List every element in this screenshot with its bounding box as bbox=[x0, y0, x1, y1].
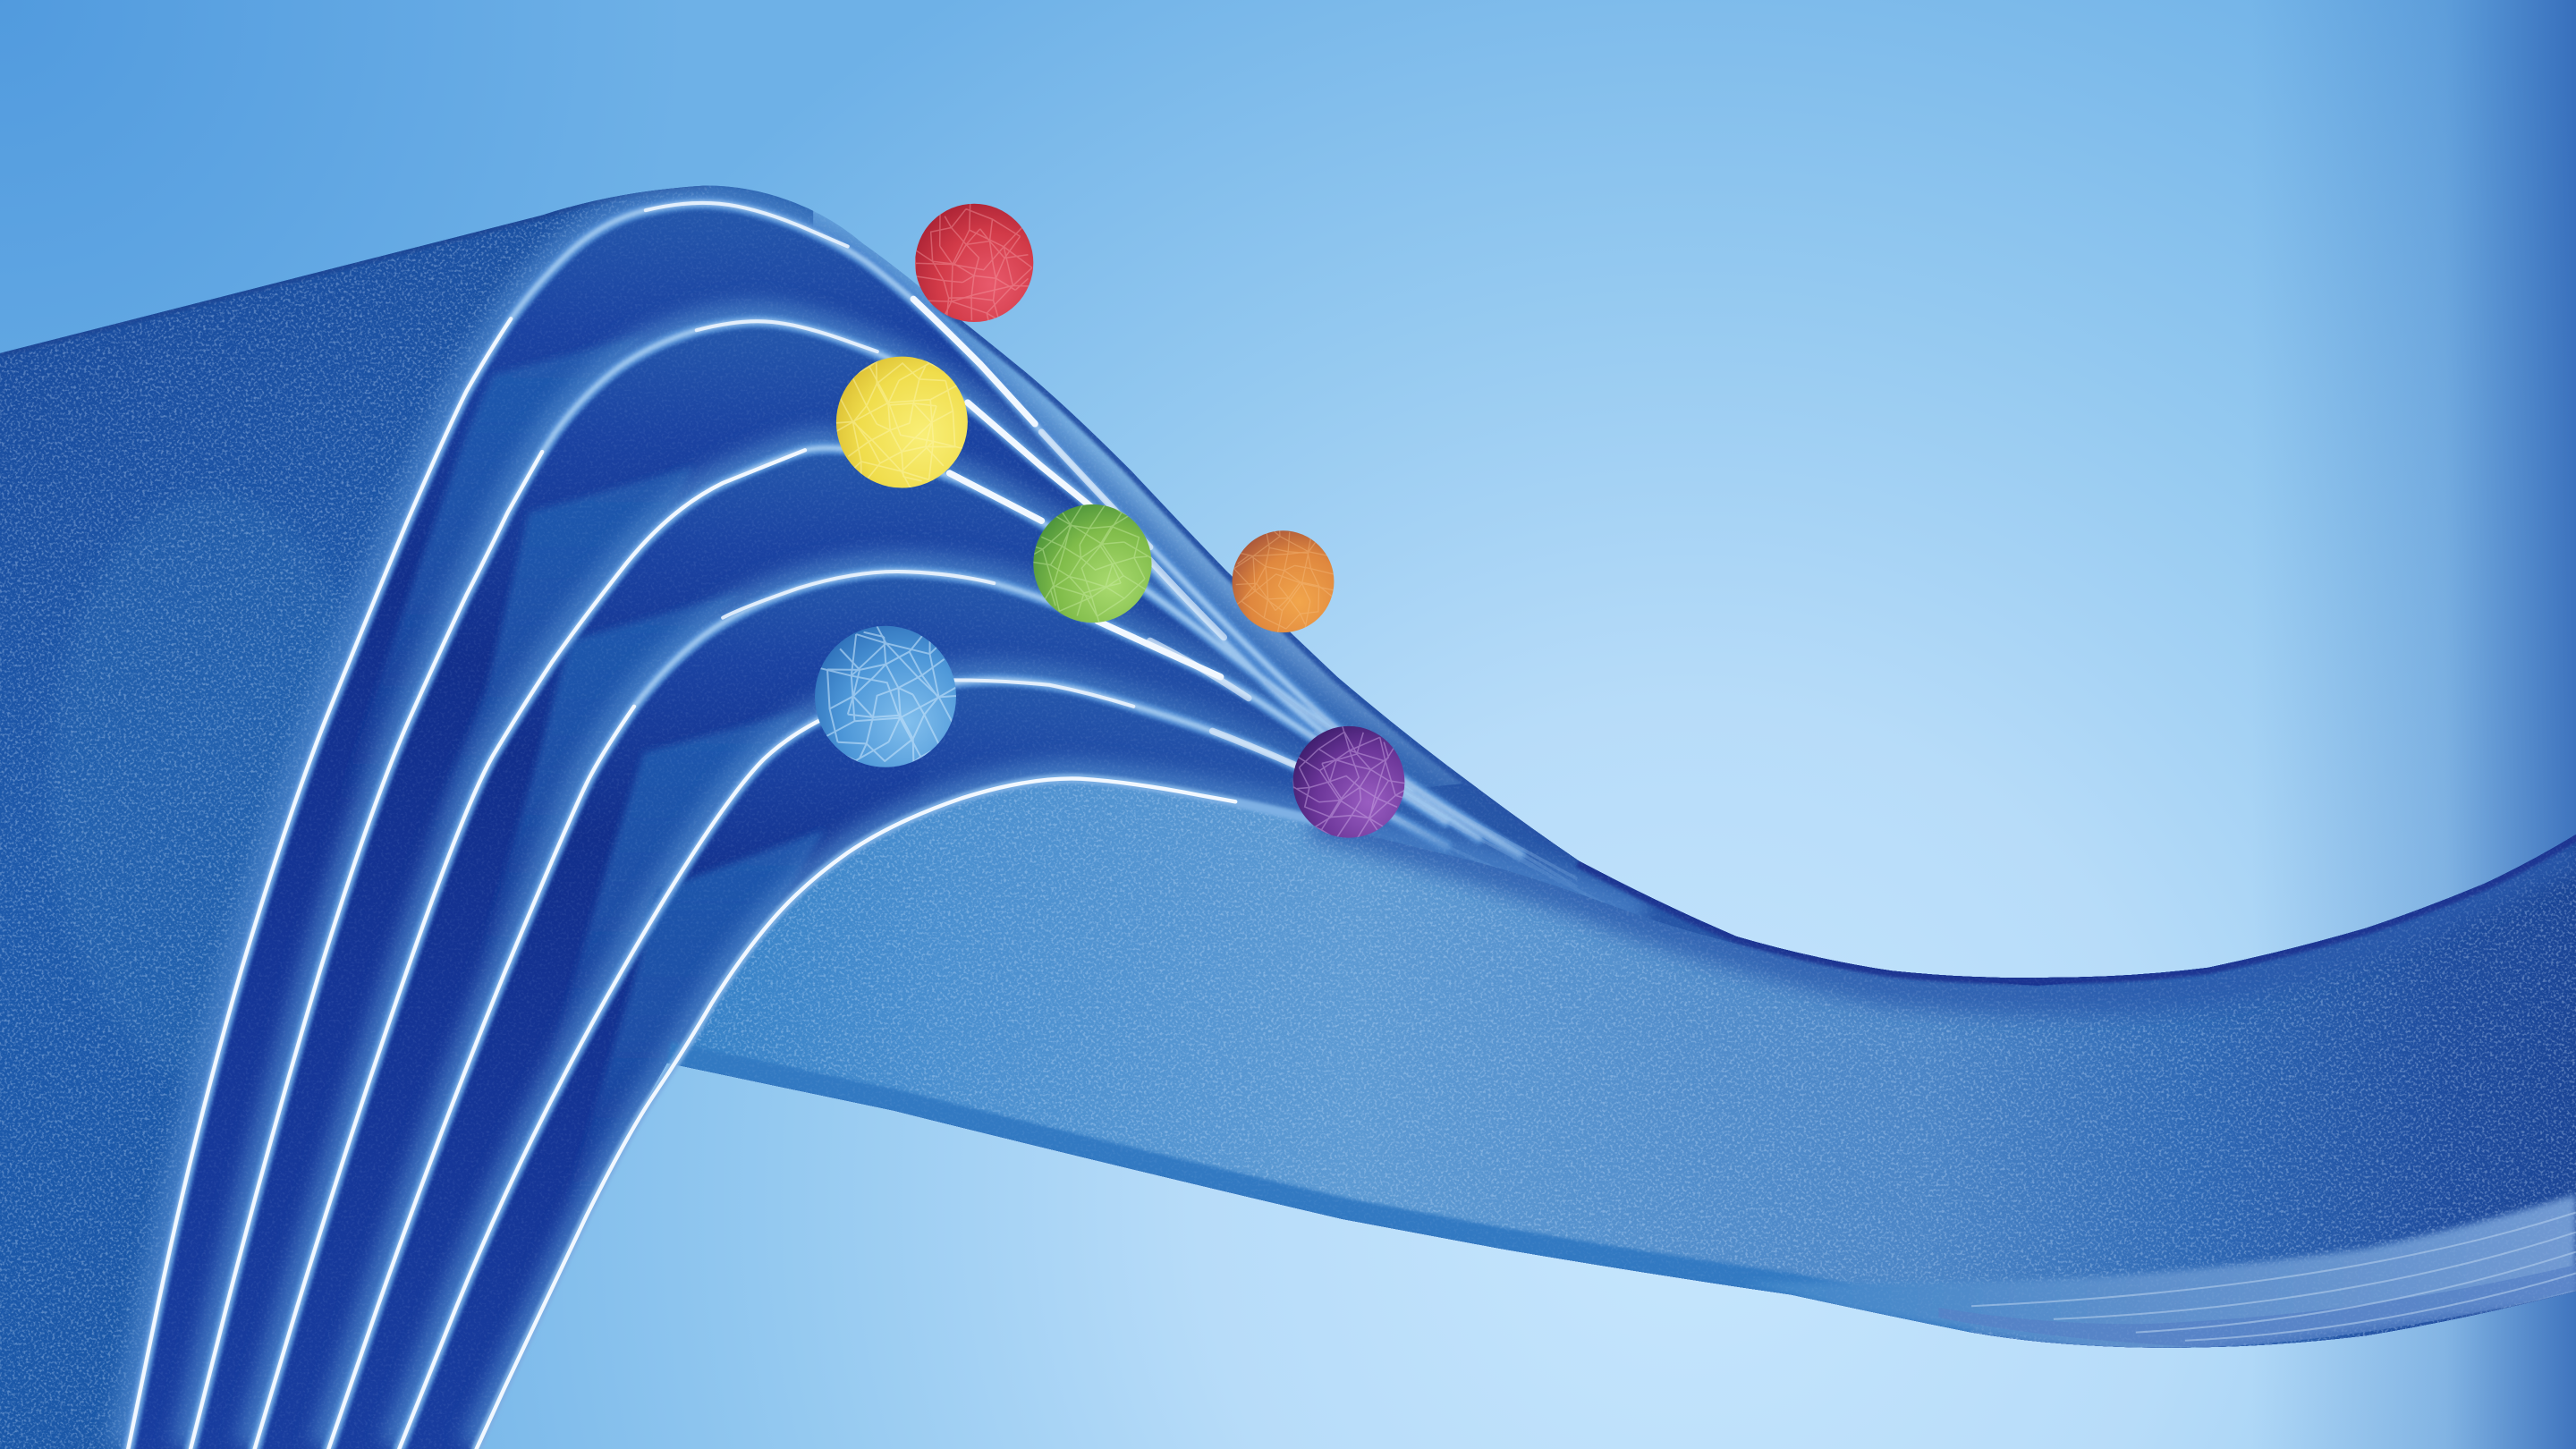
layer 2 fill and glow bbox=[191, 321, 2576, 1449]
soft light core of rim lines bbox=[128, 203, 1520, 1449]
dark shade along front face top bbox=[1314, 818, 2576, 994]
dark outer edge on descending slope bbox=[936, 301, 1579, 860]
layer 3 outer face bbox=[451, 467, 691, 785]
lower edge band of ribbon bbox=[667, 1063, 1971, 1333]
front crest highlight bbox=[477, 778, 1319, 1449]
sphere: orange bbox=[1184, 479, 1394, 693]
layer 4 fill and glow bbox=[328, 572, 2576, 1449]
last layer outer face bbox=[567, 830, 825, 1216]
stacked layer edges at lower right bbox=[1741, 1194, 2576, 1357]
ribbon left outer face bbox=[0, 186, 814, 1449]
layer 3 fill and glow bbox=[255, 448, 2576, 1449]
sphere: green bbox=[966, 426, 1233, 692]
layer 5 fill and glow bbox=[399, 674, 2576, 1449]
sphere: purple bbox=[1216, 661, 1468, 911]
layer 4 outer face bbox=[477, 591, 742, 970]
faint streaks on ribbon tail bbox=[1265, 682, 1610, 920]
layer 2 outer face bbox=[365, 342, 630, 741]
front face glow bbox=[477, 778, 1643, 1449]
sphere: yellow bbox=[767, 282, 1036, 544]
sphere: red bbox=[860, 148, 1074, 370]
ribbon tail shading bbox=[920, 165, 1840, 986]
sphere: blue bbox=[740, 564, 1031, 849]
layer 5 outer face bbox=[542, 709, 805, 1084]
dark top rim of ribbon tail bbox=[1579, 835, 2576, 978]
white highlights on layers bbox=[128, 203, 1296, 1449]
rim lines of layers bbox=[128, 203, 1520, 1449]
